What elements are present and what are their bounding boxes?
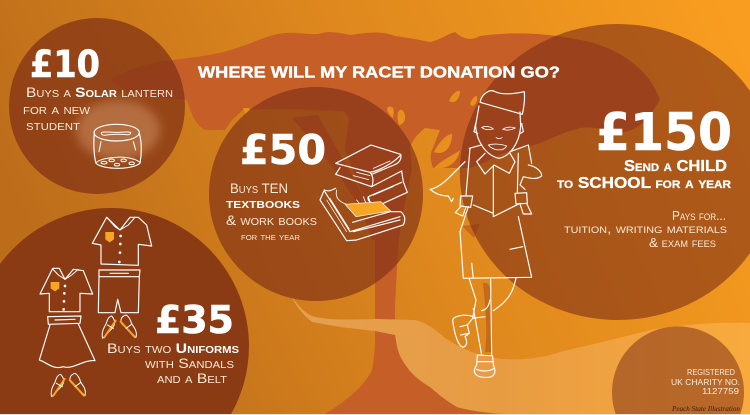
circle: £35: [0, 208, 249, 415]
shirt and collar: [473, 153, 520, 217]
work books: & work books: [226, 212, 317, 228]
panel: £35 text: [107, 298, 239, 386]
backpack straps: [455, 145, 532, 216]
icon: girl's uniform: [39, 268, 95, 397]
canopy leaf gaps: [243, 91, 477, 168]
and a belt: and a Belt: [157, 370, 227, 386]
charity number text: [671, 367, 740, 396]
circle: £10: [9, 18, 185, 194]
amount: £10: [30, 43, 100, 86]
circle: charity number: [612, 326, 744, 415]
icon: boy's uniform: [92, 217, 152, 338]
cap: [480, 91, 524, 114]
skirt / shorts: [460, 207, 532, 278]
icon: solar lantern: [94, 124, 141, 168]
panel: £50 text: [226, 126, 326, 243]
pays for: Pays for...: [672, 208, 726, 223]
amount: £50: [240, 126, 326, 174]
bottom book: [320, 188, 405, 241]
buys ten: Buys TEN: [230, 180, 288, 196]
panel: £10 text: [23, 43, 173, 133]
tree branches: [292, 112, 385, 240]
registered: REGISTERED: [687, 367, 735, 377]
description: Buys a Solar lantern: [26, 84, 173, 100]
tree silhouette: [110, 32, 660, 415]
middle book: [368, 171, 407, 204]
signature: Peach State Illustration: [671, 405, 741, 413]
sandal front: [474, 355, 495, 377]
illustration: schoolchild: [430, 91, 542, 377]
legs: [469, 278, 516, 355]
skirt: [39, 316, 95, 368]
amount: £150: [596, 103, 732, 163]
left arm: [430, 162, 465, 202]
number: 1127759: [702, 386, 739, 396]
uk charity no: UK CHARITY NO.: [671, 377, 740, 387]
panel: £150 text: [557, 103, 732, 250]
buys two uniforms: Buys two Uniforms: [107, 340, 239, 356]
textbooks: textbooks: [226, 195, 300, 211]
tree canopy: [110, 32, 660, 305]
circle: £150: [460, 24, 750, 320]
shirt: [92, 217, 152, 265]
tuition: tuition, writing materials: [564, 221, 727, 236]
exam fees: & exam fees: [649, 235, 716, 250]
icon: stack of books: [320, 145, 407, 241]
shorts: [98, 270, 140, 313]
top book: [336, 145, 402, 187]
amount: £35: [155, 298, 234, 342]
description line 2: for a new: [23, 101, 91, 117]
circle: £50: [209, 87, 423, 301]
lantern glow: [76, 100, 160, 160]
sandals: [102, 315, 136, 338]
description line 3: student: [26, 117, 80, 133]
ground path: [290, 293, 750, 415]
sandals: [51, 373, 85, 397]
face: [474, 106, 523, 158]
eyes and mouth: [482, 126, 515, 150]
send a child: Send a CHILD: [624, 158, 727, 175]
with sandals: with Sandals: [145, 355, 234, 371]
to school for a year: to SCHOOL for a year: [557, 175, 731, 192]
right arm: [520, 165, 542, 189]
sandal back: [453, 315, 473, 347]
highlighted page: [345, 202, 391, 217]
figure shadows: [462, 224, 492, 352]
tree trunk flare: [323, 300, 510, 415]
title: WHERE WILL MY RACET DONATION GO?: [198, 64, 560, 82]
for the year: for the year: [241, 231, 300, 243]
shirt: [40, 268, 93, 312]
